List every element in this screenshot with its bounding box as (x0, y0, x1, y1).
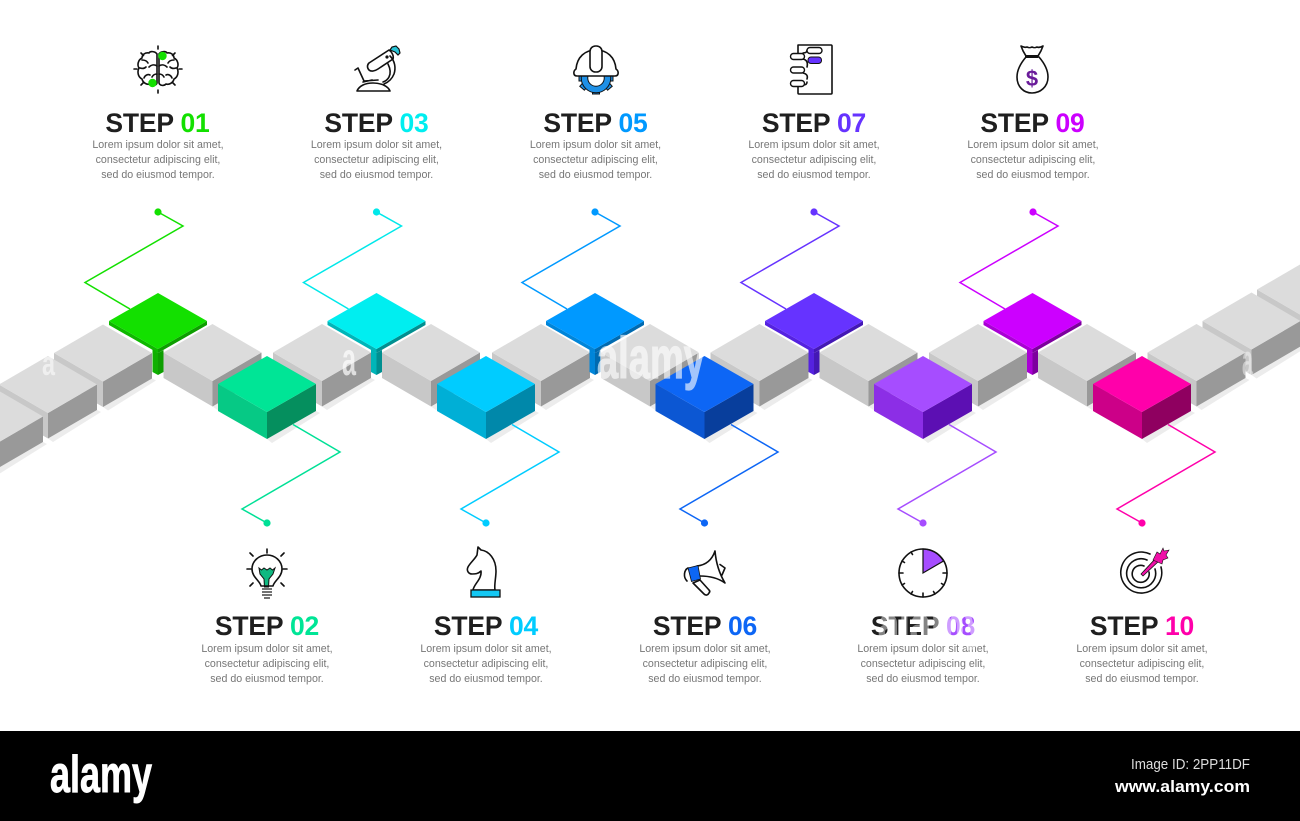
block: step 10 cube (1093, 356, 1195, 443)
heading: step 10: STEP 10 (1090, 611, 1194, 641)
footer image id: Image ID: 2PP11DF (1131, 757, 1250, 773)
block: step 05 raised plate (546, 293, 644, 375)
text: step 08 description: Lorem ipsum dolor sit amet, (857, 643, 989, 655)
icon: notebook (790, 45, 832, 94)
heading: step 05: STEP 05 (543, 108, 648, 138)
watermark: stock overlays: alamy (878, 598, 986, 650)
footer bar (0, 731, 1300, 821)
icon: helmet with gear (574, 46, 618, 94)
text: step 02 description: consectetur adipiscing elit, (205, 658, 329, 670)
text: step 09 description: sed do eiusmod tempor. (976, 169, 1090, 181)
block: step 06 cube (656, 356, 758, 443)
panel: step 07 (748, 45, 880, 181)
text: step 10 description: consectetur adipiscing elit, (1080, 658, 1204, 670)
text: step 02 description: sed do eiusmod tempor. (210, 673, 324, 685)
panel: step 03 (311, 46, 442, 181)
panel: step 04 (420, 547, 552, 685)
panel: step 01 (92, 46, 224, 181)
text: step 09 description: consectetur adipiscing elit, (971, 154, 1095, 166)
isometric grey track (0, 261, 1300, 474)
text: step 07 description: Lorem ipsum dolor sit amet, (748, 139, 880, 151)
icon: brain (134, 46, 182, 93)
text: step 03 description: consectetur adipiscing elit, (314, 154, 439, 166)
text: step 04 description: Lorem ipsum dolor sit amet, (420, 643, 552, 655)
text: step 05 description: consectetur adipiscing elit, (533, 154, 658, 166)
panel: step 10 (1076, 548, 1208, 685)
text: step 06 description: sed do eiusmod tempor. (648, 673, 762, 685)
watermark: stock overlays: alamy (597, 326, 705, 391)
footer logo: alamy (50, 746, 152, 804)
watermark: stock overlays (42, 326, 1253, 650)
text: step 06 description: Lorem ipsum dolor sit amet, (639, 643, 771, 655)
block: step 04 cube (437, 356, 539, 443)
text: step 04 description: sed do eiusmod tempor. (429, 673, 543, 685)
panel: step 02 (201, 549, 333, 685)
footer website: www.alamy.com (1114, 778, 1250, 796)
block: step 02 cube (218, 356, 320, 443)
text: step 07 description: consectetur adipiscing elit, (752, 154, 876, 166)
panel: step 05 (530, 46, 661, 181)
block: step 07 raised plate (765, 293, 863, 375)
panel: step 09 (967, 46, 1099, 181)
text: step 01 description: Lorem ipsum dolor sit amet, (92, 139, 224, 151)
block: step 01 raised plate (109, 293, 207, 375)
block: step 08 cube (874, 356, 976, 443)
text: step 04 description: consectetur adipiscing elit, (424, 658, 548, 670)
text: step 01 description: sed do eiusmod tempor. (101, 169, 215, 181)
heading: step 06: STEP 06 (653, 611, 757, 641)
icon: clock (899, 549, 947, 597)
text: step 03 description: sed do eiusmod tempor. (320, 169, 433, 181)
icon: microscope (355, 46, 400, 91)
text: step 06 description: consectetur adipiscing elit, (643, 658, 767, 670)
icon: target with arrow (1121, 548, 1169, 593)
block: step 09 raised plate (984, 293, 1082, 375)
text: step 01 description: consectetur adipiscing elit, (96, 154, 220, 166)
heading: step 03: STEP 03 (324, 108, 429, 138)
watermark: stock overlays: a (42, 345, 56, 383)
watermark: stock overlays: a (342, 333, 356, 385)
icon: chess knight (467, 547, 500, 597)
text: step 03 description: Lorem ipsum dolor sit amet, (311, 139, 442, 151)
block: step 03 raised plate (328, 293, 426, 375)
heading: step 01: STEP 01 (105, 108, 210, 138)
icon: money bag: $ (1026, 66, 1038, 91)
heading: step 09: STEP 09 (980, 108, 1085, 138)
text: step 05 description: sed do eiusmod tempor. (539, 169, 652, 181)
text: step 09 description: Lorem ipsum dolor sit amet, (967, 139, 1099, 151)
text: step 10 description: Lorem ipsum dolor sit amet, (1076, 643, 1208, 655)
text: step 08 description: sed do eiusmod tempor. (866, 673, 980, 685)
icon: megaphone (684, 551, 725, 595)
text: step 02 description: Lorem ipsum dolor sit amet, (201, 643, 333, 655)
heading: step 04: STEP 04 (434, 611, 539, 641)
icon: light bulb (247, 549, 287, 598)
heading: step 08: STEP 08 (871, 611, 975, 641)
text: step 08 description: consectetur adipiscing elit, (861, 658, 985, 670)
heading: step 02: STEP 02 (215, 611, 319, 641)
text: step 07 description: sed do eiusmod tempor. (757, 169, 871, 181)
leader lines (85, 208, 1215, 527)
panel: step 06 (639, 551, 771, 685)
panel: step 08 (857, 549, 989, 685)
text: a (1242, 336, 1253, 385)
text: step 05 description: Lorem ipsum dolor sit amet, (530, 139, 661, 151)
text: step 10 description: sed do eiusmod tempor. (1085, 673, 1199, 685)
heading: step 07: STEP 07 (762, 108, 866, 138)
